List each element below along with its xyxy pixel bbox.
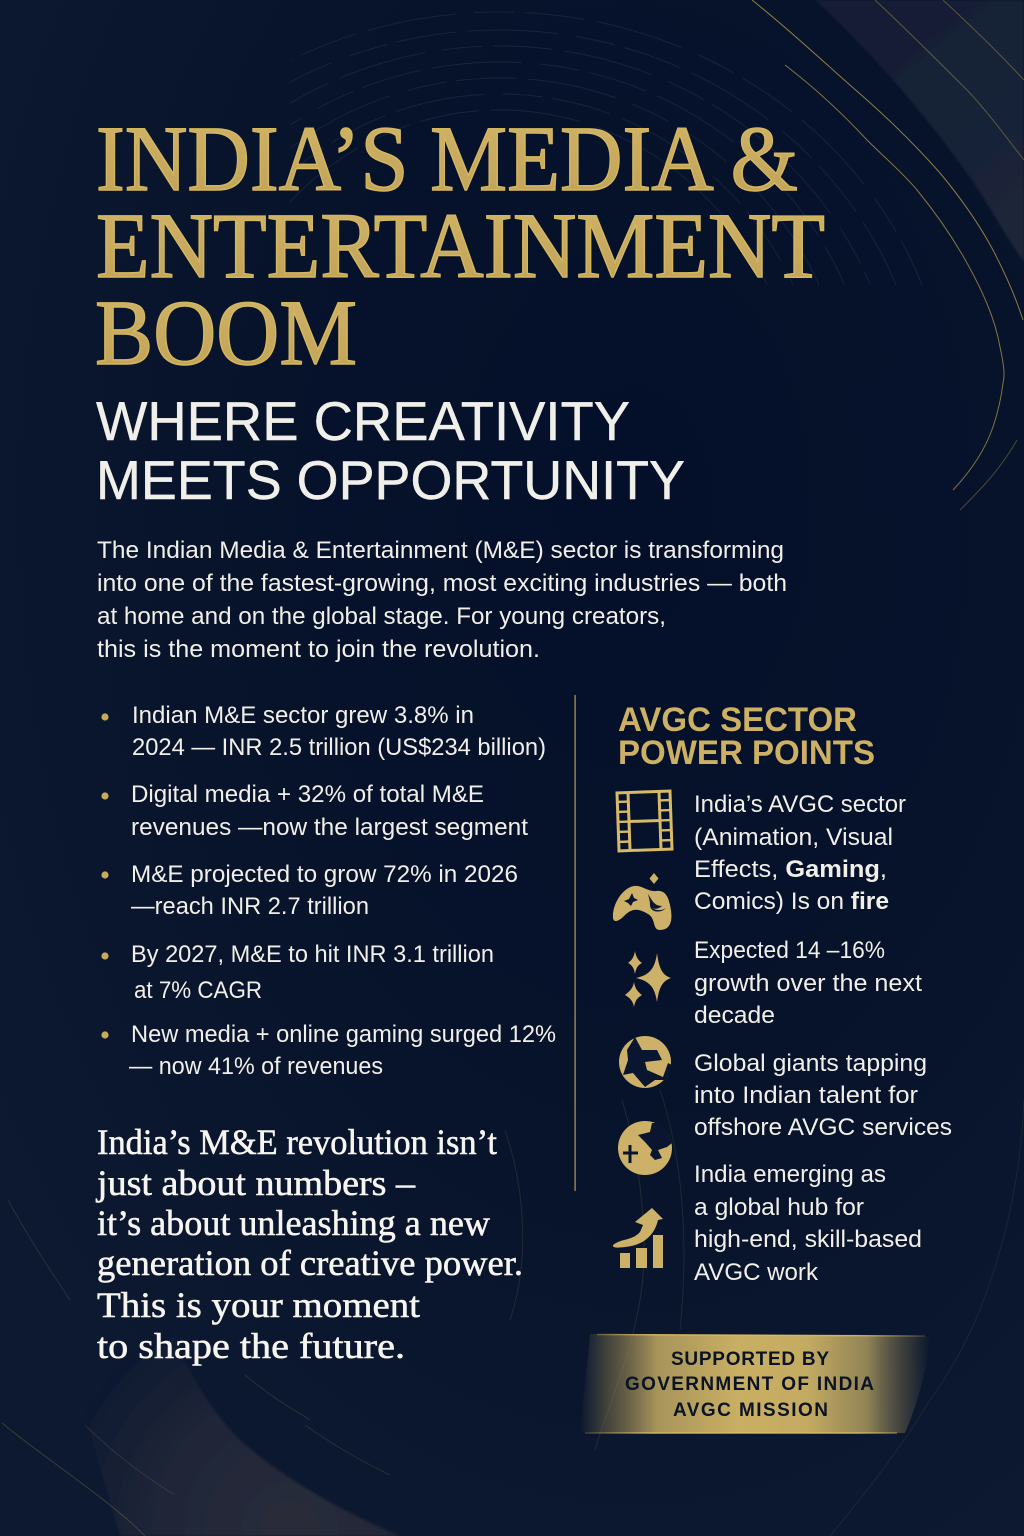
bullet: new media and gaming: New media + online gaming surged 12% [131, 1021, 556, 1048]
closing statement: India’s M&E revolution isn’t [97, 1122, 497, 1162]
AVGC text: global hub [694, 1161, 922, 1286]
closing statement [95, 1122, 523, 1366]
closing statement: generation of creative power. [97, 1243, 523, 1283]
icon: film strip [617, 791, 672, 851]
bullet: sector growth: 2024 — INR 2.5 trillion (US$234 billion) [132, 734, 546, 761]
bullet: sector growth [101, 702, 546, 761]
closing statement: This is your moment [97, 1285, 420, 1325]
closing statement: to shape the future. [97, 1326, 405, 1366]
closing statement: it’s about unleashing a new [97, 1203, 490, 1243]
bullet: 2027 projection: By 2027, M&E to hit INR 3.1 trillion [131, 941, 494, 968]
AVGC text: global hub: a global hub for [694, 1194, 864, 1221]
bullet: digital media: revenues —now the largest segment [131, 814, 528, 841]
bullet: new media and gaming: — now 41% of revenues [129, 1053, 383, 1080]
AVGC text: expected growth: growth over the next [694, 970, 922, 997]
AVGC text: sector on fire: Comics) Is on fire [694, 888, 889, 915]
subtitle [96, 390, 685, 511]
icon: sparkles [625, 951, 671, 1007]
AVGC text: global giants: Global giants tapping [694, 1050, 927, 1077]
bullet: 2027 projection [101, 941, 494, 1004]
badge: government support: SUPPORTED BY [671, 1349, 829, 1370]
icon: growth chart with arrow [613, 1208, 663, 1268]
bullet: digital media: Digital media + 32% of total M&E [131, 781, 484, 808]
intro paragraph [97, 537, 787, 663]
AVGC text: global giants: into Indian talent for [694, 1082, 918, 1109]
AVGC text: sector on fire: Effects, Gaming, [694, 856, 887, 883]
icon: globe with stars [618, 1121, 672, 1175]
AVGC text: global giants: offshore AVGC services [694, 1114, 952, 1141]
subtitle: WHERE CREATIVITY [96, 390, 630, 452]
title [95, 108, 825, 385]
icon: game controller [613, 873, 671, 930]
closing statement: just about numbers – [95, 1163, 416, 1203]
title: ENTERTAINMENT [96, 195, 825, 298]
AVGC text: global hub: high-end, skill-based [694, 1226, 922, 1253]
AVGC text: sector on fire: India’s AVGC sector [694, 791, 906, 818]
AVGC heading: POWER POINTS [618, 734, 875, 772]
AVGC text: global hub: India emerging as [694, 1161, 886, 1188]
AVGC text: sector on fire [694, 791, 906, 915]
bullet: new media and gaming [101, 1021, 556, 1080]
AVGC heading: AVGC SECTOR [618, 701, 857, 739]
bullet: 2026 projection: M&E projected to grow 72% in 2026 [131, 861, 518, 888]
intro paragraph: this is the moment to join the revolution. [97, 636, 540, 663]
title: BOOM [95, 282, 357, 385]
bullet: 2026 projection [101, 861, 518, 920]
AVGC text: expected growth: decade [694, 1002, 775, 1029]
badge: government support [580, 1334, 930, 1433]
intro paragraph: The Indian Media & Entertainment (M&E) sector is transforming [97, 537, 784, 564]
icon: globe [619, 1036, 672, 1088]
AVGC text: global giants [694, 1050, 952, 1141]
AVGC text: expected growth: Expected 14 –16% [694, 937, 885, 964]
intro paragraph: at home and on the global stage. For young creators, [97, 603, 666, 630]
bullet: sector growth: Indian M&E sector grew 3.8% in [132, 702, 474, 729]
bullet list: market statistics [101, 702, 556, 1080]
AVGC heading [618, 701, 875, 772]
badge: government support: AVGC MISSION [673, 1400, 828, 1421]
title: INDIA’S MEDIA & [96, 108, 798, 211]
badge: government support: GOVERNMENT OF INDIA [625, 1374, 874, 1395]
AVGC text: global hub: AVGC work [694, 1259, 819, 1286]
bullet: 2027 projection: at 7% CAGR [134, 977, 262, 1004]
bullet: digital media [101, 781, 528, 841]
intro paragraph: into one of the fastest-growing, most exciting industries — both [97, 570, 787, 597]
bullet: 2026 projection: —reach INR 2.7 trillion [131, 893, 369, 920]
column divider [574, 695, 576, 1191]
AVGC text: expected growth [694, 937, 922, 1029]
AVGC text: sector on fire: (Animation, Visual [694, 824, 893, 851]
subtitle: MEETS OPPORTUNITY [96, 449, 685, 511]
